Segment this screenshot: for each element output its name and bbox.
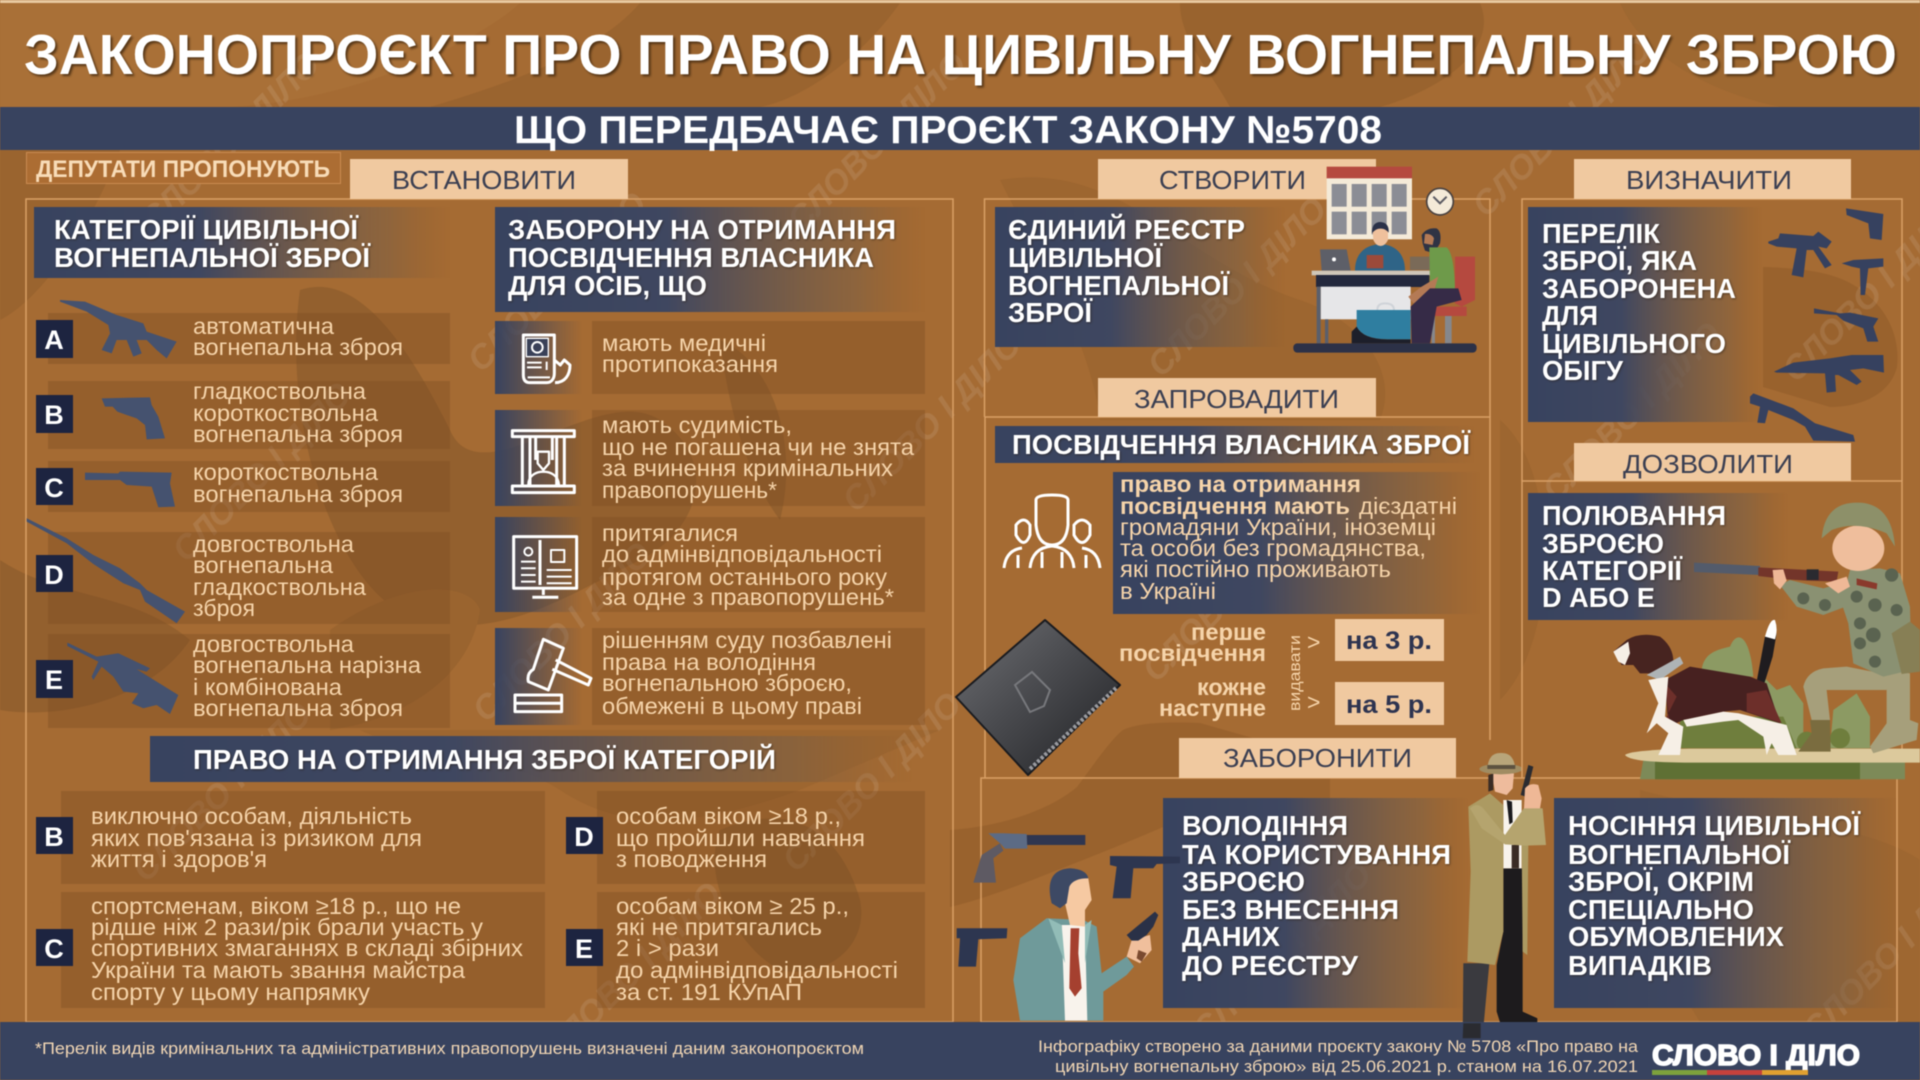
tab: встановити: ВСТАНОВИТИ xyxy=(392,165,576,195)
tab: запровадити xyxy=(1098,378,1376,417)
watermarks: СЛОВО І ДІЛО xyxy=(775,685,969,879)
prohibition: possession: ВОЛОДІННЯ xyxy=(1182,810,1348,841)
prohibition: possession: ЗБРОЄЮ xyxy=(1182,866,1305,897)
hunting heading xyxy=(1528,493,1788,620)
subtitle bar: ЩО ПЕРЕДБАЧАЄ ПРОЄКТ ЗАКОНУ №5708 xyxy=(514,109,1382,152)
category C: C xyxy=(44,473,64,503)
heading: ban: ЗАБОРОНУ НА ОТРИМАННЯ xyxy=(508,214,896,245)
eligibility text: які постійно проживають xyxy=(1120,556,1391,582)
icon: gavel xyxy=(515,639,591,712)
heading: owner certificate: ПОСВІДЧЕННЯ ВЛАСНИКА ЗБРОЇ xyxy=(1012,429,1471,460)
category A xyxy=(36,300,450,364)
prohibition: carrying: НОСІННЯ ЦИВІЛЬНОЇ xyxy=(1568,810,1861,841)
category B: B xyxy=(44,400,64,430)
tab: заборонити: ЗАБОРОНИТИ xyxy=(1223,743,1412,773)
footer xyxy=(0,1022,1920,1080)
category D xyxy=(27,518,450,624)
category A: A xyxy=(44,325,64,355)
hunting heading: КАТЕГОРІЇ xyxy=(1542,555,1683,586)
panel: запровадити xyxy=(956,378,1490,778)
ban: court: права на володіння xyxy=(602,649,816,675)
source text: Інфографіку створено за даними проєкту закону № 5708 «Про право на xyxy=(1038,1037,1639,1056)
eligibility text: дієздатні xyxy=(1359,493,1457,519)
category E: і комбінована xyxy=(193,674,342,700)
icon: medical document xyxy=(523,335,570,383)
tab: визначити: ВИЗНАЧИТИ xyxy=(1626,165,1792,195)
category C xyxy=(36,459,450,512)
source text: цивільну вогнепальну зброю» від 25.06.2021 р. станом на 16.07.2021 xyxy=(1055,1057,1638,1076)
icon: monitor xyxy=(514,537,577,597)
prohibition: possession: БЕЗ ВНЕСЕННЯ xyxy=(1182,894,1399,925)
first certificate: перше xyxy=(1191,619,1266,645)
panel: заборонити xyxy=(957,738,1897,1038)
right E: за ст. 191 КУпАП xyxy=(616,979,802,1005)
right E: 2 і > рази xyxy=(616,935,719,961)
right D: що пройшли навчання xyxy=(616,825,865,851)
next certificate: кожне xyxy=(1197,674,1266,700)
right E: до адмінвідповідальності xyxy=(616,957,898,983)
watermarks: СЛОВО І ДІЛО xyxy=(1465,30,1659,224)
banned list heading: ДЛЯ xyxy=(1542,300,1598,331)
watermarks: СЛОВО І ДІЛО xyxy=(535,875,729,1069)
subtitle bar xyxy=(0,107,1920,152)
hunting heading: D АБО Е xyxy=(1542,582,1655,613)
tab: заборонити xyxy=(1179,738,1456,778)
footnote: *Перелік видів кримінальних та адміністративних правопорушень визначені даним законопроєктом xyxy=(35,1039,864,1058)
watermarks: СЛОВО І ДІЛО xyxy=(1185,855,1379,1049)
ban: court xyxy=(495,627,925,725)
heading: categories: КАТЕГОРІЇ ЦИВІЛЬНОЇ xyxy=(54,214,359,245)
right B: B xyxy=(44,822,64,852)
tab: створити xyxy=(1098,159,1376,199)
icon: people xyxy=(1004,495,1100,568)
ban: administrative: притягалися xyxy=(602,520,738,546)
right B: життя і здоров'я xyxy=(91,846,267,872)
next certificate: > xyxy=(1307,689,1320,715)
panel: визначити xyxy=(1522,159,1902,481)
next certificate xyxy=(1159,674,1444,725)
heading: right to obtain xyxy=(150,736,912,782)
right E xyxy=(566,892,925,1008)
category A: автоматична xyxy=(193,313,334,339)
category B: короткоствольна xyxy=(193,400,378,426)
heading: ban: ДЛЯ ОСІБ, ЩО xyxy=(508,270,707,301)
ban: convicted: за вчинення кримінальних xyxy=(602,455,894,481)
category A: вогнепальна зброя xyxy=(193,334,403,360)
right B: яких пов'язана із ризиком для xyxy=(91,825,422,851)
tab: дозволити: ДОЗВОЛИТИ xyxy=(1623,449,1793,479)
banned list heading: ЗБРОЇ, ЯКА xyxy=(1542,245,1697,276)
tab: визначити xyxy=(1574,159,1851,199)
eligibility text: та особи без громадянства, xyxy=(1120,535,1426,561)
ban: court: рішенням суду позбавлені xyxy=(602,627,892,653)
icon: pistol xyxy=(1110,856,1180,898)
prohibition: possession: ДО РЕЄСТРУ xyxy=(1182,950,1359,981)
category B: вогнепальна зброя xyxy=(193,421,403,447)
registry heading: ЦИВІЛЬНОЇ xyxy=(1008,242,1163,273)
category C: вогнепальна зброя xyxy=(193,481,403,507)
illustration: hunter and dog xyxy=(1613,503,1920,779)
ban: court: обмежені в цьому праві xyxy=(602,693,862,719)
category E: вогнепальна нарізна xyxy=(193,652,421,678)
category D: довгоствольна xyxy=(193,531,354,557)
watermarks: СЛОВО І ДІЛО xyxy=(125,695,319,889)
registry heading: ВОГНЕПАЛЬНОЇ xyxy=(1008,270,1230,301)
watermarks: СЛОВО І ДІЛО xyxy=(780,45,974,239)
ban: convicted: мають судимість, xyxy=(602,412,792,438)
ban: convicted: правопорушень* xyxy=(602,477,777,503)
right C: спорту у цьому напрямку xyxy=(91,979,371,1005)
first certificate: > xyxy=(1307,629,1320,655)
right C: C xyxy=(44,934,64,964)
prohibition: carrying: ВОГНЕПАЛЬНОЇ xyxy=(1568,839,1791,870)
watermarks: СЛОВО І ДІЛО xyxy=(465,535,659,729)
tab: запровадити: ЗАПРОВАДИТИ xyxy=(1134,384,1339,414)
icon: small pistol xyxy=(957,928,1007,967)
category E: довгоствольна xyxy=(193,631,354,657)
icon: wallet xyxy=(956,620,1120,775)
ban: convicted xyxy=(495,410,925,506)
source text xyxy=(1038,1037,1639,1076)
prohibition: carrying: ОБУМОВЛЕНИХ xyxy=(1568,921,1784,952)
right D: з поводження xyxy=(616,846,767,872)
watermarks: СЛОВО І ДІЛО xyxy=(133,45,327,239)
banned list heading: ОБІГУ xyxy=(1542,355,1624,386)
right C xyxy=(36,892,545,1008)
heading: categories: ВОГНЕПАЛЬНОЇ ЗБРОЇ xyxy=(54,242,371,273)
category E: E xyxy=(45,665,63,695)
tab: створити: СТВОРИТИ xyxy=(1159,165,1306,195)
right B: виключно особам, діяльність xyxy=(91,803,412,829)
watermarks: СЛОВО І ДІЛО xyxy=(1135,495,1329,689)
tab: встановити xyxy=(350,159,628,199)
illustration: detective xyxy=(1463,753,1546,1038)
illustration: office xyxy=(1293,167,1477,353)
ban: medical: протипоказання xyxy=(602,351,778,377)
detective legs over footer xyxy=(1463,1023,1481,1038)
registry heading: ЄДИНИЙ РЕЄСТР xyxy=(1008,213,1245,245)
first certificate: посвідчення xyxy=(1119,640,1266,666)
right C: України та мають звання майстра xyxy=(91,957,465,983)
prohibition: possession xyxy=(1163,798,1468,1008)
prohibition: carrying xyxy=(1554,798,1897,1008)
ban: court: вогнепальною зброєю, xyxy=(602,670,852,696)
ban: administrative: до адмінвідповідальності xyxy=(602,541,882,567)
right C: спортсменам, віком ≥18 р., що не xyxy=(91,893,461,919)
prohibition: possession: ТА КОРИСТУВАННЯ xyxy=(1182,839,1451,870)
ban: administrative: за одне з правопорушень* xyxy=(602,584,894,610)
ban: medical xyxy=(495,321,925,394)
registry heading xyxy=(995,207,1285,347)
banned list heading xyxy=(1528,207,1762,422)
icons: banned guns xyxy=(1750,208,1884,442)
icon: prison bars xyxy=(512,431,574,493)
tab: дозволити xyxy=(1574,443,1851,481)
right D: особам віком ≥18 р., xyxy=(616,803,841,829)
right E: особам віком ≥ 25 р., xyxy=(616,893,849,919)
right D: D xyxy=(574,822,594,852)
label: deputies propose: ДЕПУТАТИ ПРОПОНУЮТЬ xyxy=(36,156,330,183)
eligibility text: посвідчення мають xyxy=(1120,493,1350,519)
watermarks: СЛОВО І ДІЛО xyxy=(1535,315,1729,509)
next certificate: наступне xyxy=(1159,695,1266,721)
banned list heading: ПЕРЕЛІК xyxy=(1542,218,1661,249)
eligibility text: в Україні xyxy=(1120,578,1216,604)
issue label: видавати xyxy=(1287,635,1304,711)
category D: D xyxy=(44,560,64,590)
panel: встановити xyxy=(26,159,953,1022)
ban: administrative xyxy=(495,517,925,612)
hunting heading: ЗБРОЄЮ xyxy=(1542,528,1664,559)
prohibition: carrying: СПЕЦІАЛЬНО xyxy=(1568,894,1754,925)
icon: revolver xyxy=(973,833,1085,883)
category E xyxy=(36,631,450,728)
first certificate xyxy=(1119,619,1444,666)
title: ЗАКОНОПРОЄКТ ПРО ПРАВО НА ЦИВІЛЬНУ ВОГНЕПАЛЬНУ ЗБРОЮ xyxy=(24,23,1897,87)
category D: гладкоствольна xyxy=(193,574,366,600)
eligibility text: громадяни України, іноземці xyxy=(1120,514,1436,540)
category C: короткоствольна xyxy=(193,459,378,485)
prohibition: possession: ДАНИХ xyxy=(1182,921,1280,952)
prohibition: carrying: ВИПАДКІВ xyxy=(1568,950,1712,981)
eligibility text xyxy=(1113,471,1480,614)
panel: дозволити xyxy=(1522,443,1920,779)
right E: які не притягались xyxy=(616,914,822,940)
banned list heading: ЗАБОРОНЕНА xyxy=(1542,273,1736,304)
hunting heading: ПОЛЮВАННЯ xyxy=(1542,500,1726,531)
right B xyxy=(36,791,545,884)
heading: ban xyxy=(495,207,925,312)
panel: створити xyxy=(984,159,1490,417)
registry heading: ЗБРОЇ xyxy=(1008,297,1093,328)
ban: administrative: протягом останнього року xyxy=(602,564,888,590)
prohibition: carrying: ЗБРОЇ, ОКРІМ xyxy=(1568,866,1754,897)
watermarks: СЛОВО І ДІЛО xyxy=(1140,190,1334,384)
watermarks: СЛОВО І ДІЛО xyxy=(835,325,1029,519)
category D: зброя xyxy=(193,595,255,621)
category B xyxy=(36,378,450,449)
heading: ban: ПОСВІДЧЕННЯ ВЛАСНИКА xyxy=(508,242,874,273)
eligibility text: право на отримання xyxy=(1120,471,1361,497)
right C: рідше ніж 2 рази/рік брали участь у xyxy=(91,914,484,940)
category D: вогнепальна xyxy=(193,552,333,578)
right E: E xyxy=(575,934,593,964)
watermarks: СЛОВО І ДІЛО xyxy=(165,375,359,569)
logo: СЛОВО І ДІЛО xyxy=(1652,1040,1860,1072)
first certificate: на 3 р. xyxy=(1346,627,1432,655)
next certificate: на 5 р. xyxy=(1346,691,1432,719)
right D xyxy=(566,791,925,884)
ban: medical: мають медичні xyxy=(602,330,766,356)
watermarks: СЛОВО І ДІЛО xyxy=(460,185,654,379)
heading: categories xyxy=(34,207,450,278)
right C: спортивних змаганнях в складі збірних xyxy=(91,935,524,961)
ban: convicted: що не погашена чи не знята xyxy=(602,434,914,460)
category B: гладкоствольна xyxy=(193,378,366,404)
category E: вогнепальна зброя xyxy=(193,695,403,721)
heading: right to obtain: ПРАВО НА ОТРИМАННЯ ЗБРОЇ КАТЕГОРІЙ xyxy=(193,743,776,775)
banned list heading: ЦИВІЛЬНОГО xyxy=(1542,328,1726,359)
illustration: man with gun xyxy=(1013,868,1158,1021)
